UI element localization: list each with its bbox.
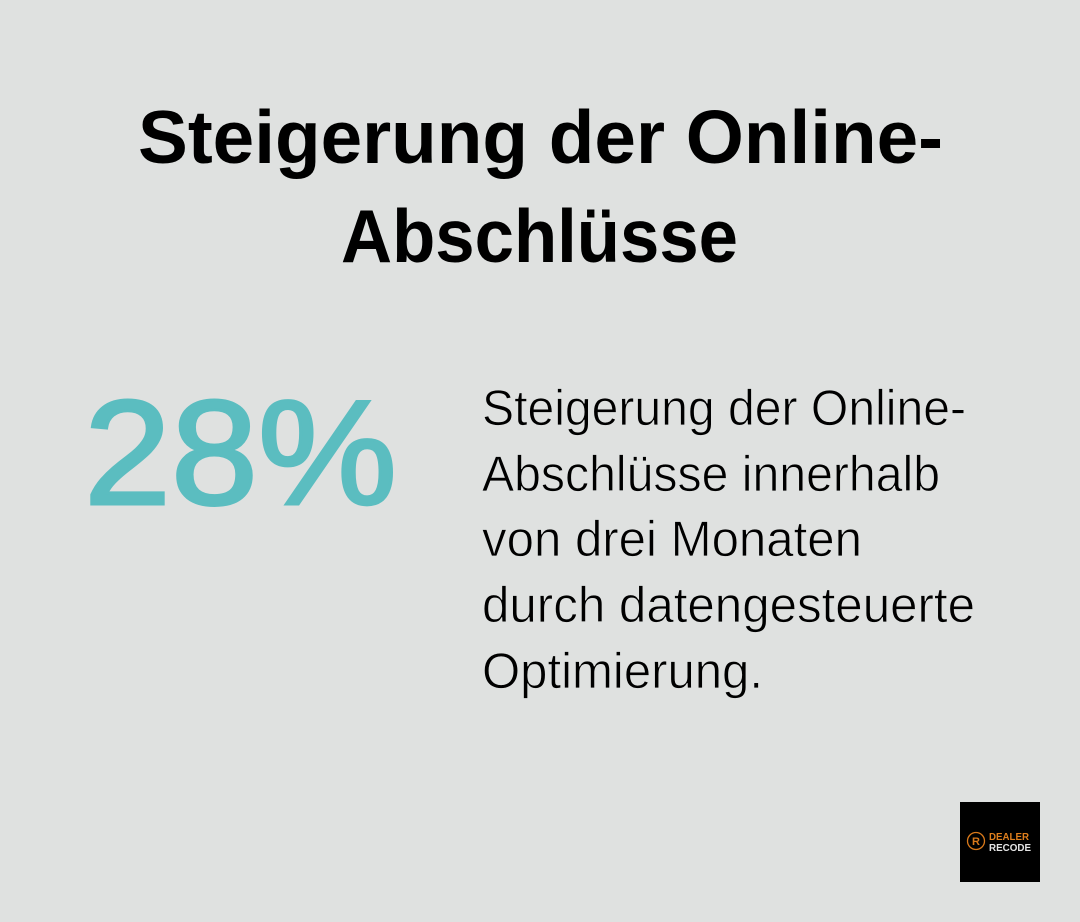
description text xyxy=(482,380,975,699)
title xyxy=(138,95,943,278)
description text: von drei Monaten xyxy=(482,511,862,567)
logo: Dealer Recode xyxy=(960,802,1040,882)
logo wordmark xyxy=(989,831,1031,854)
title: Abschlüsse xyxy=(341,194,738,278)
logo wordmark: RECODE xyxy=(989,842,1031,854)
title: Steigerung der Online- xyxy=(138,95,943,179)
icon: R emblem: R xyxy=(972,836,980,848)
statistic: 28%: 28% xyxy=(84,369,397,536)
description text: Optimierung. xyxy=(482,643,763,699)
description text: Abschlüsse innerhalb xyxy=(482,446,940,502)
description text: Steigerung der Online- xyxy=(482,380,966,436)
description text: durch datengesteuerte xyxy=(482,577,975,633)
logo wordmark: DEALER xyxy=(989,831,1029,843)
